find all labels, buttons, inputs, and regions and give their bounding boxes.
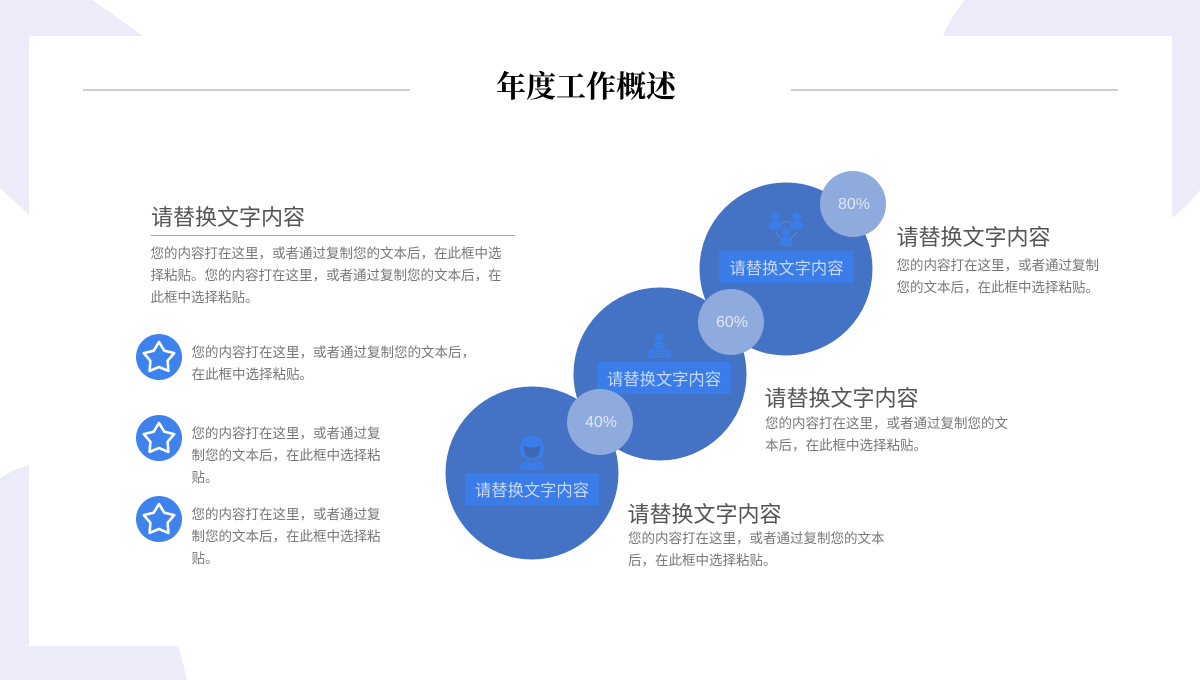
right text middle: 本后，在此框中选择粘贴。 — [765, 438, 927, 453]
label box — [597, 362, 731, 394]
star text 3: 贴。 — [192, 551, 218, 566]
title rule left — [83, 89, 410, 91]
middle circle 60% — [574, 288, 746, 460]
icon: person at desk — [648, 334, 671, 358]
star text 3: 制您的文本后，在此框中选择粘 — [192, 529, 380, 544]
left intro text: 择粘贴。您的内容打在这里，或者通过复制您的文本后，在 — [150, 268, 502, 283]
percent 80: 80% — [838, 196, 870, 213]
left intro text: 您的内容打在这里，或者通过复制您的文本后，在此框中选 — [150, 246, 502, 261]
title rule right — [791, 89, 1118, 91]
icon: three people — [769, 212, 803, 246]
right heading middle: 请替换文字内容 — [764, 386, 919, 411]
right text middle: 您的内容打在这里，或者通过复制您的文 — [765, 416, 1008, 431]
icon: person portrait — [520, 436, 544, 470]
bottom circle 40% — [446, 386, 618, 560]
percent 40: 40% — [585, 414, 617, 431]
star text 3 — [192, 507, 380, 566]
title: 年度工作概述 — [496, 71, 676, 104]
right heading top: 请替换文字内容 — [896, 225, 1051, 250]
circle label middle: 请替换文字内容 — [607, 371, 721, 389]
star icon 1 — [136, 334, 182, 380]
star icon 3 — [136, 496, 182, 542]
right text bottom: 您的内容打在这里，或者通过复制您的文本 — [628, 531, 884, 546]
circle label bottom: 请替换文字内容 — [475, 482, 589, 500]
label box — [465, 473, 599, 505]
star icon 2 — [136, 415, 182, 461]
top circle 80% — [700, 182, 872, 356]
star text 1: 在此框中选择粘贴。 — [192, 367, 313, 382]
star text 1: 您的内容打在这里，或者通过复制您的文本后， — [192, 345, 475, 360]
right text bottom — [628, 531, 884, 568]
right text middle — [765, 416, 1008, 453]
left heading: 请替换文字内容 — [151, 205, 305, 230]
right text bottom: 后，在此框中选择粘贴。 — [628, 553, 776, 568]
circle label top: 请替换文字内容 — [730, 260, 843, 278]
right text top: 您的文本后，在此框中选择粘贴。 — [896, 280, 1099, 295]
percent 60: 60% — [716, 314, 748, 331]
left intro text: 此框中选择粘贴。 — [150, 290, 258, 305]
badge 60% — [698, 289, 764, 355]
star text 2: 制您的文本后，在此框中选择粘 — [192, 448, 380, 463]
badge 80% — [820, 171, 886, 237]
right text top — [896, 258, 1099, 295]
label box — [719, 251, 854, 283]
star text 1 — [192, 345, 475, 382]
heading underline — [151, 235, 515, 236]
right text top: 您的内容打在这里，或者通过复制 — [896, 258, 1099, 273]
badge 40% — [567, 389, 633, 455]
star text 2: 您的内容打在这里，或者通过复 — [192, 426, 380, 441]
star text 2 — [192, 426, 380, 485]
right heading bottom: 请替换文字内容 — [628, 502, 782, 527]
left intro text — [150, 246, 502, 305]
star text 2: 贴。 — [192, 470, 218, 485]
star text 3: 您的内容打在这里，或者通过复 — [192, 507, 380, 522]
